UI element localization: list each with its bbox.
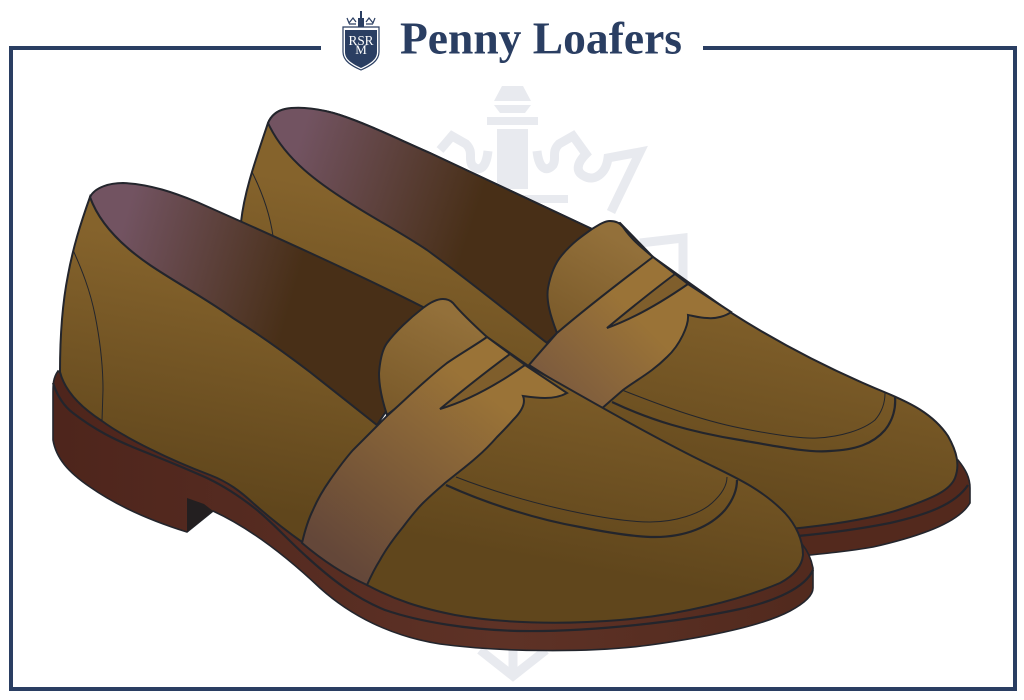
front shoe penny strap [302, 337, 567, 585]
logo crest: M [355, 42, 367, 57]
front shoe apron stitching [446, 480, 737, 537]
back shoe apron stitching [612, 397, 895, 451]
front shoe upper [60, 197, 803, 623]
back shoe upper [241, 108, 957, 529]
title: Penny Loafers [400, 12, 682, 64]
logo crest: RSR [348, 34, 374, 49]
back shoe lining [268, 108, 592, 343]
back shoe tongue [547, 221, 653, 333]
back shoe heel seam [252, 172, 273, 236]
front shoe sole groove [53, 383, 813, 631]
watermark crest [440, 86, 683, 676]
front shoe [53, 183, 813, 651]
logo crest [343, 11, 379, 70]
back shoe [241, 108, 970, 556]
front shoe heel seam [73, 250, 103, 421]
back shoe strap slit [607, 274, 688, 328]
back shoe sole groove [798, 485, 968, 536]
front shoe heel notch [187, 498, 213, 532]
front shoe sole [53, 371, 813, 651]
front shoe lining [90, 183, 440, 425]
back shoe penny strap [529, 257, 731, 410]
front shoe strap slit [440, 354, 525, 409]
back shoe sole [780, 460, 970, 556]
front shoe tongue [379, 299, 487, 415]
